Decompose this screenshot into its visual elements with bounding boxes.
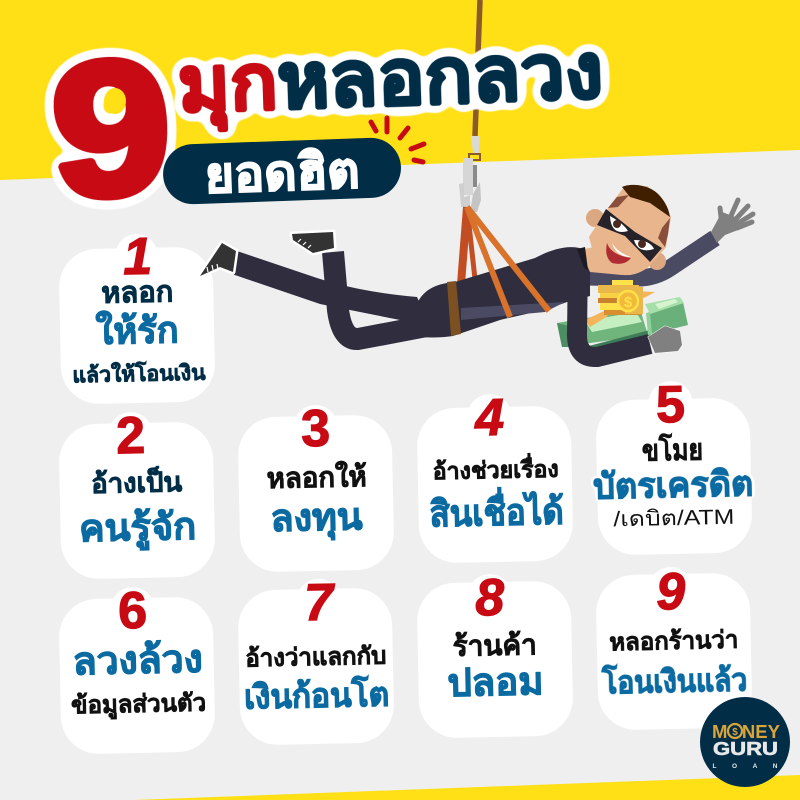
card 5: /เดบิต/ATM xyxy=(613,506,735,531)
logo: Money Guru Loan xyxy=(700,697,790,787)
orange straps xyxy=(467,207,549,317)
card 2: คนรู้จัก xyxy=(79,506,197,552)
card 7: เงินก้อนโต xyxy=(244,674,389,716)
card 4: 4 xyxy=(474,389,505,447)
card 6 xyxy=(58,580,216,755)
card 9 xyxy=(595,561,753,731)
card 9: โอนเงินแล้ว xyxy=(601,661,747,701)
card 9: หลอกร้านว่า xyxy=(609,627,739,656)
logo: Money Guru Loan: GURU xyxy=(713,739,778,759)
pill: ยอดฮิต: ยอดฮิต xyxy=(204,142,360,204)
card 5: ขโมย xyxy=(642,431,703,468)
card 5: 5 xyxy=(655,376,686,434)
money stack xyxy=(557,280,688,358)
torso xyxy=(412,247,590,338)
card 4: อ้างช่วยเรื่อง xyxy=(432,452,559,484)
card 6: 6 xyxy=(118,582,148,640)
rope and harness xyxy=(459,0,481,284)
card 7: 7 xyxy=(304,574,336,632)
mask xyxy=(597,209,662,262)
card 8 xyxy=(416,567,574,739)
card 5: บัตรเครดิต xyxy=(593,464,754,507)
card 7: อ้างว่าแลกกับ xyxy=(245,643,387,672)
front arm xyxy=(577,256,650,357)
big number 9: 9 xyxy=(48,21,174,237)
shoe: bent leg xyxy=(292,232,334,253)
mouth xyxy=(606,243,631,264)
legs xyxy=(200,232,435,339)
card 3: ลงทุน xyxy=(270,496,363,542)
title words: มุกหลอกลวง xyxy=(177,29,604,133)
card 3: หลอกให้ xyxy=(266,460,367,494)
back arm and hand xyxy=(585,200,753,278)
title xyxy=(48,21,604,237)
card 1: 1 xyxy=(123,228,153,286)
card 3 xyxy=(237,398,395,573)
logo: Money Guru Loan: $ xyxy=(732,727,738,738)
card 2 xyxy=(58,405,216,580)
logo: Money Guru Loan: LOAN xyxy=(712,763,778,770)
yellow spot inside the 9 xyxy=(104,88,126,114)
card 5 xyxy=(591,374,755,556)
card 8: 8 xyxy=(475,569,505,627)
waist strap xyxy=(461,302,565,320)
card 9: 9 xyxy=(656,563,686,621)
eyes xyxy=(610,216,628,232)
card 6: ลวงล้วง xyxy=(72,639,203,683)
logo: Money Guru Loan: MONEY xyxy=(712,722,780,742)
card 8: ปลอม xyxy=(447,661,544,705)
card 1: ให้รัก xyxy=(95,308,179,352)
shoe: rear xyxy=(200,243,236,276)
waving glove xyxy=(711,200,753,243)
front hand xyxy=(648,326,682,353)
card 1 xyxy=(58,226,216,405)
card 1: หลอก xyxy=(101,276,174,310)
coins: $ xyxy=(624,294,633,311)
hair xyxy=(622,185,670,217)
belt xyxy=(447,281,461,336)
card 4: สินเชื่อได้ xyxy=(429,486,564,534)
pill: ยอดฮิต xyxy=(162,137,402,205)
card 2: อ้างเป็น xyxy=(91,464,183,499)
card 1: แล้วให้โอนเงิน xyxy=(72,360,206,387)
head xyxy=(577,185,670,275)
card 6: ข้อมูลส่วนตัว xyxy=(71,690,206,720)
card 2: 2 xyxy=(116,407,146,465)
card 4 xyxy=(416,387,574,564)
card 7 xyxy=(237,572,395,746)
card 8: ร้านค้า xyxy=(452,629,537,662)
spark lines xyxy=(371,118,424,162)
card 3: 3 xyxy=(301,400,331,458)
